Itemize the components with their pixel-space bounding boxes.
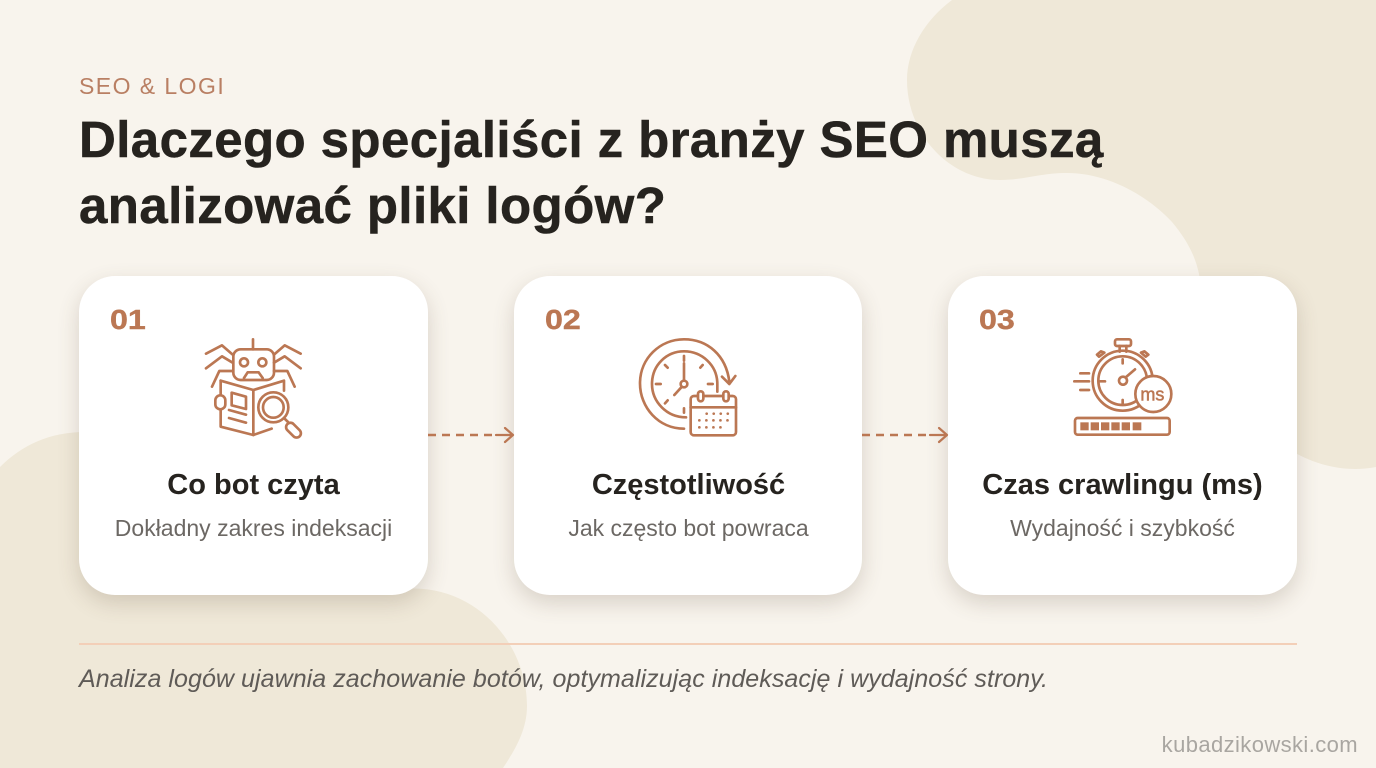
summary text: Analiza logów ujawnia zachowanie botów, optymalizując indeksację i wydajność strony. xyxy=(79,665,1048,693)
credit: kubadzikowski.com xyxy=(1162,732,1358,757)
icon: spider robot reading xyxy=(204,338,302,439)
description: card 1: Dokładny zakres indeksacji xyxy=(115,515,392,541)
arrow: card 2 to card 3 xyxy=(862,426,948,444)
eyebrow label: SEO & LOGI xyxy=(79,73,225,99)
heading: Co bot czyta: Co bot czyta xyxy=(167,469,340,501)
icon: clock with calendar xyxy=(638,338,738,437)
description: card 2: Jak często bot powraca xyxy=(568,515,809,541)
number 03: 03 xyxy=(979,304,1015,335)
arrow: card 1 to card 2 xyxy=(428,426,514,444)
description: card 3: Wydajność i szybkość xyxy=(1010,515,1235,541)
panel: card 3 xyxy=(948,276,1297,595)
number 01: 01 xyxy=(110,304,146,335)
heading: Czas crawlingu: Czas crawlingu (ms) xyxy=(982,469,1263,501)
number 02: 02 xyxy=(545,304,581,335)
heading: Częstotliwość: Częstotliwość xyxy=(592,469,785,501)
divider xyxy=(79,643,1297,645)
panel: card 1 xyxy=(79,276,428,595)
title xyxy=(79,111,1104,234)
icon: stopwatch with ms badge xyxy=(1073,338,1173,436)
panel: card 2 xyxy=(514,276,862,595)
icon: stopwatch with ms badge: ms xyxy=(1140,384,1164,404)
title: Dlaczego specjaliści z branży SEO muszą xyxy=(79,111,1104,168)
title: analizować pliki logów? xyxy=(79,177,666,234)
